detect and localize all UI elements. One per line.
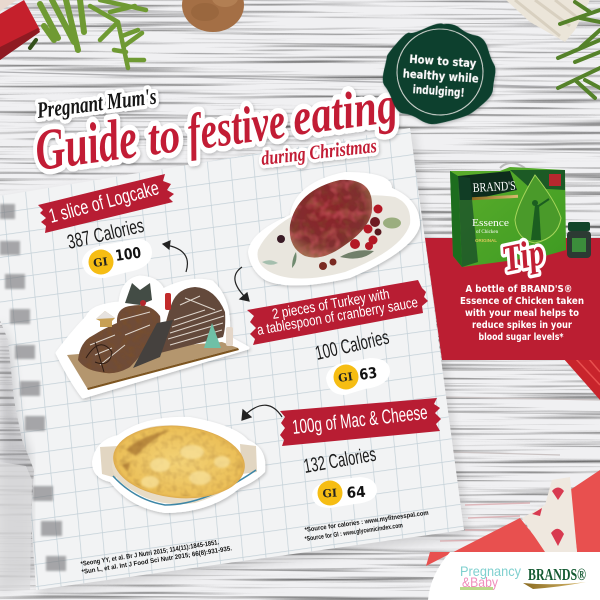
notebook paper with grid bbox=[0, 128, 464, 590]
GI badge: 100 bbox=[82, 239, 152, 278]
GI badge: 100: 100 bbox=[114, 244, 142, 265]
GI badge: 64 bbox=[312, 477, 377, 508]
gratin highlights bbox=[141, 445, 230, 488]
decoration: walnut bbox=[182, 0, 244, 32]
banner: 1 slice of Logcake bbox=[38, 174, 174, 233]
panel: tip bbox=[425, 163, 600, 360]
GI badge: 63 bbox=[326, 358, 390, 395]
cake board bbox=[67, 342, 238, 388]
plate shadow at left edge bbox=[0, 320, 32, 590]
badge: how to stay healthy: How to stay bbox=[409, 52, 477, 71]
logo: BRANDS bbox=[523, 565, 586, 589]
holly bbox=[125, 283, 152, 305]
product: jar bbox=[567, 222, 591, 258]
logo: Pregnancy and Baby: &Baby bbox=[462, 574, 498, 590]
food photo: turkey on plate bbox=[248, 172, 420, 286]
tip text: blood sugar levels* bbox=[478, 332, 564, 343]
sources: calories and GI: *Source for calories : www.myfitnesspal.com bbox=[304, 510, 429, 534]
dish body bbox=[112, 425, 244, 504]
product: essence of chicken box: ORIGINAL bbox=[475, 238, 497, 243]
tip text: A bottle of BRAND'S® bbox=[466, 284, 572, 295]
badge: how to stay healthy: healthy while bbox=[402, 66, 479, 86]
paper shadow bbox=[4, 132, 468, 595]
bark streaks bbox=[90, 296, 224, 365]
title line: Guide to festive eating: to bbox=[144, 106, 183, 166]
binder hole shadows bbox=[0, 204, 66, 571]
food photo: mac and cheese dish bbox=[92, 417, 265, 513]
dish handles bbox=[100, 446, 118, 478]
label: Tip: Tip bbox=[498, 231, 548, 281]
sources: calories and GI: *Source for GI : www.glycemicindex.com bbox=[304, 522, 403, 543]
turkey meat bbox=[290, 180, 372, 258]
banner: 2 pieces of Turkey bbox=[247, 280, 428, 345]
GI badge: 63: 63 bbox=[358, 364, 378, 384]
calories: 132: 132 Calories bbox=[302, 444, 378, 478]
log: right section bbox=[160, 287, 225, 353]
calories: 100: 100 Calories bbox=[313, 327, 391, 365]
tip text bbox=[460, 284, 584, 343]
decoration: pink reflections on wood bbox=[440, 503, 530, 541]
title line: Guide to festive eating: eating bbox=[289, 77, 401, 147]
log end swirl bbox=[86, 342, 112, 372]
GI badge: 64: GI bbox=[322, 487, 337, 501]
title line: during Christmas: during Christmas bbox=[260, 135, 378, 170]
logo: Pregnancy and Baby: Pregnancy bbox=[460, 563, 521, 579]
decoration: knit fabric top-right bbox=[506, 0, 590, 42]
calories: 387: 387 Calories bbox=[65, 215, 146, 254]
badge: how to stay healthy bbox=[380, 20, 499, 128]
GI badge: 100: GI bbox=[92, 255, 109, 270]
christmas tree bbox=[204, 323, 221, 348]
banner: 2 pieces of Turkey: 2 pieces of Turkey with bbox=[271, 287, 391, 323]
title line: Guide to festive eating: Guide bbox=[31, 105, 141, 183]
plate bbox=[258, 195, 410, 278]
food photo: logcake bbox=[57, 277, 248, 397]
badge: how to stay healthy: indulging! bbox=[412, 82, 465, 100]
decoration: red gift with ribbon bottom-right bbox=[426, 470, 600, 566]
arrow: mac banner to mac dish bbox=[242, 405, 282, 420]
product: essence of chicken box: of Chicken bbox=[476, 230, 499, 235]
references: studies: *Sun L, et al. Int J Food Sci Nutr 2015; 66(8):931-935. bbox=[81, 545, 233, 576]
decoration: red ribbon under tip panel bbox=[563, 358, 600, 400]
banner: 100g of Mac and Cheese: 100g of Mac & Cheese bbox=[291, 402, 429, 439]
tip text: Essence of Chicken taken bbox=[460, 296, 584, 307]
product: essence of chicken box bbox=[450, 163, 566, 267]
panel: logos bbox=[428, 552, 600, 600]
dark chocolate slab bbox=[133, 320, 173, 368]
decoration: red gift top-left bbox=[0, 0, 40, 60]
logo: Pregnancy and Baby bbox=[460, 563, 521, 590]
title line: Guide to festive eating bbox=[31, 77, 401, 183]
references: studies: *Seong YY, et al. Br J Nutri 2015; 114(11):1845-1851. bbox=[80, 539, 220, 568]
gingerbread house bbox=[96, 311, 115, 327]
product label text: BRAND'S bbox=[472, 178, 516, 195]
banner: 100g of Mac and Cheese bbox=[280, 398, 441, 446]
arrow: logcake GI to logcake bbox=[163, 241, 187, 272]
decoration: fir branches top-left bbox=[30, 0, 146, 68]
tip text: reduce spikes in your bbox=[472, 320, 572, 331]
product: essence of chicken box: Essence bbox=[472, 218, 509, 229]
GI badge: 64: 64 bbox=[346, 483, 366, 502]
arrow: turkey banner to turkey bbox=[235, 267, 249, 301]
baked gratin bbox=[110, 420, 248, 504]
decoration: fir branches top-right bbox=[558, 2, 600, 98]
snowman bbox=[226, 327, 233, 346]
banner: 2 pieces of Turkey: a tablespoon of cranberry sauce bbox=[256, 295, 419, 339]
tip text: with your meal helps to bbox=[465, 308, 579, 319]
sage leaves bbox=[340, 250, 374, 259]
product drop emblem bbox=[515, 175, 561, 243]
banner: 1 slice of Logcake: 1 slice of Logcake bbox=[47, 177, 161, 228]
title line: Pregnant Mum's: Pregnant Mum's bbox=[35, 84, 158, 123]
log: left section bbox=[78, 305, 160, 373]
title line: Guide to festive eating: festive bbox=[184, 92, 289, 162]
cranberries bbox=[277, 204, 382, 270]
title bbox=[31, 77, 401, 183]
GI badge: 63: GI bbox=[337, 370, 354, 385]
santa figure bbox=[165, 293, 171, 310]
